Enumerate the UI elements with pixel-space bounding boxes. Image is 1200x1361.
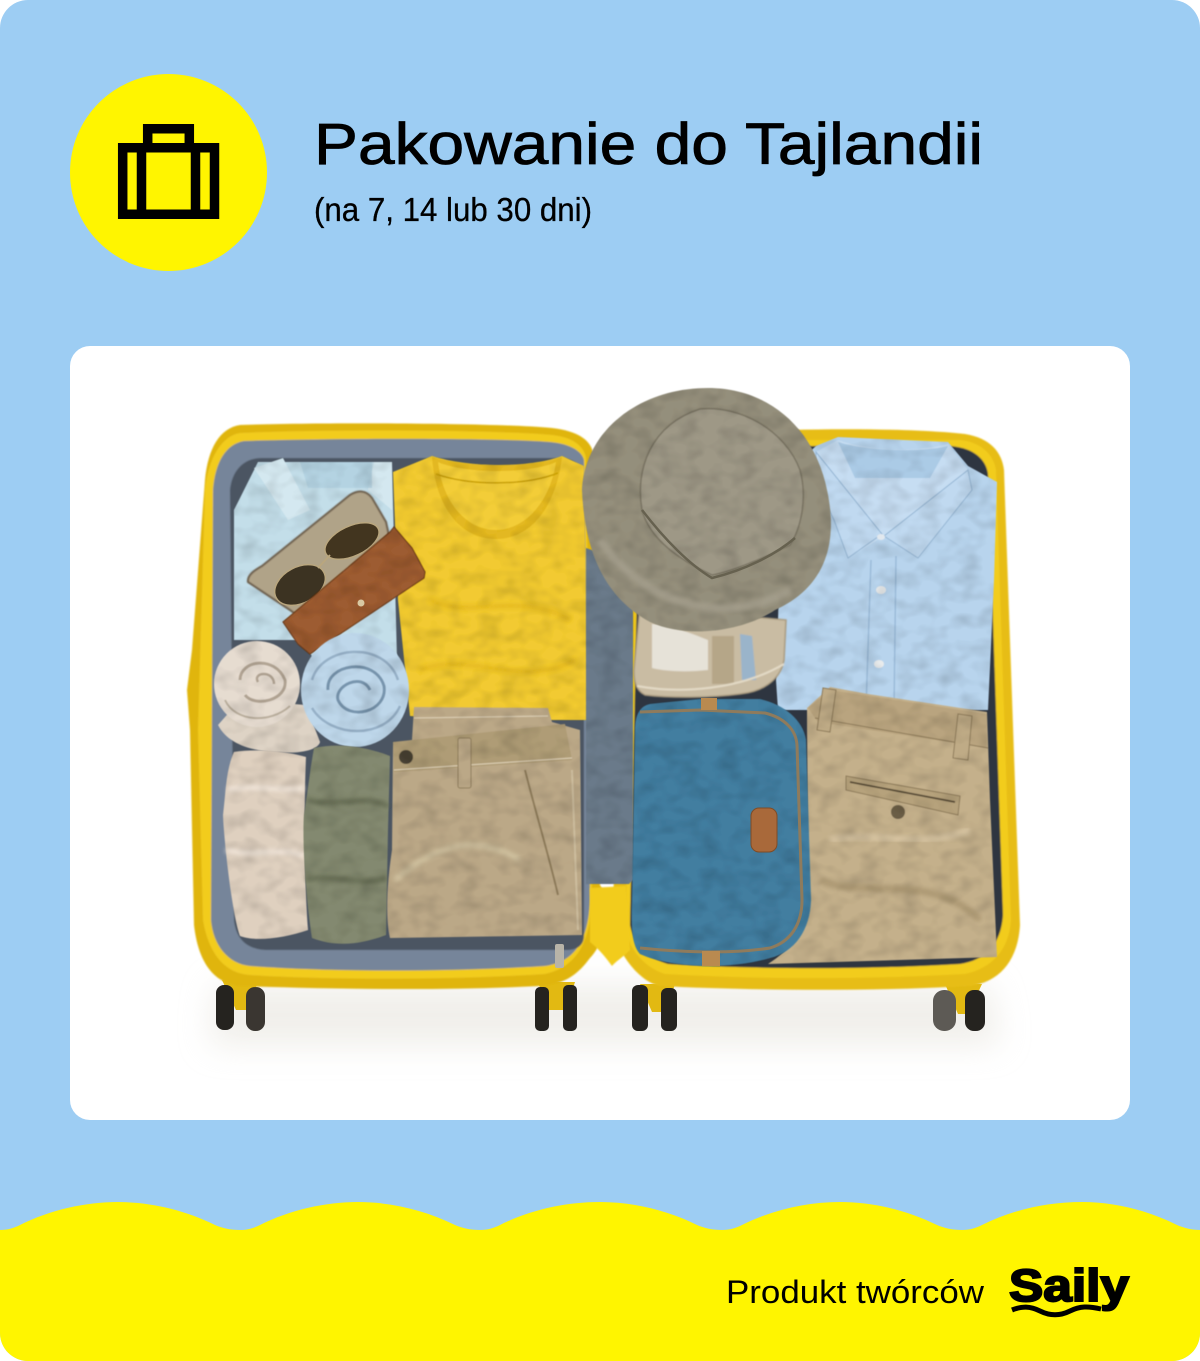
icon: yellow circle with suitcase — [70, 74, 267, 271]
light blue shirt — [776, 437, 997, 710]
right khaki trousers — [768, 687, 997, 964]
yellow t-shirt — [393, 456, 588, 720]
rolled beige scarf — [214, 641, 320, 753]
folded olive cloth — [303, 746, 390, 944]
wheels — [216, 980, 985, 1031]
title: Pakowanie do Tajlandii — [314, 112, 983, 177]
rolled blue scarf — [301, 633, 409, 747]
right suitcase shell — [612, 429, 1020, 990]
left shirt — [234, 458, 397, 680]
blue toiletry bag — [632, 698, 811, 966]
floor shadow — [210, 985, 1000, 1045]
zip pull — [555, 944, 564, 968]
folded beige cloth — [223, 750, 308, 939]
sunglasses — [274, 522, 380, 606]
yellow wave footer — [0, 1202, 1200, 1361]
panel: packed suitcase photo — [70, 346, 1130, 1120]
bucket hat — [582, 388, 831, 631]
subtitle: (na 7, 14 lub 30 dni) — [314, 191, 592, 228]
mesh pouch — [634, 606, 786, 697]
sunglasses case — [248, 492, 425, 654]
left khaki trousers — [387, 707, 582, 938]
centre divider and hinge — [586, 548, 633, 966]
Saily logo: Saily — [1009, 1260, 1129, 1311]
footer label: Produkt twórców — [726, 1274, 985, 1310]
left suitcase shell — [187, 423, 606, 989]
leather patch — [751, 808, 777, 852]
